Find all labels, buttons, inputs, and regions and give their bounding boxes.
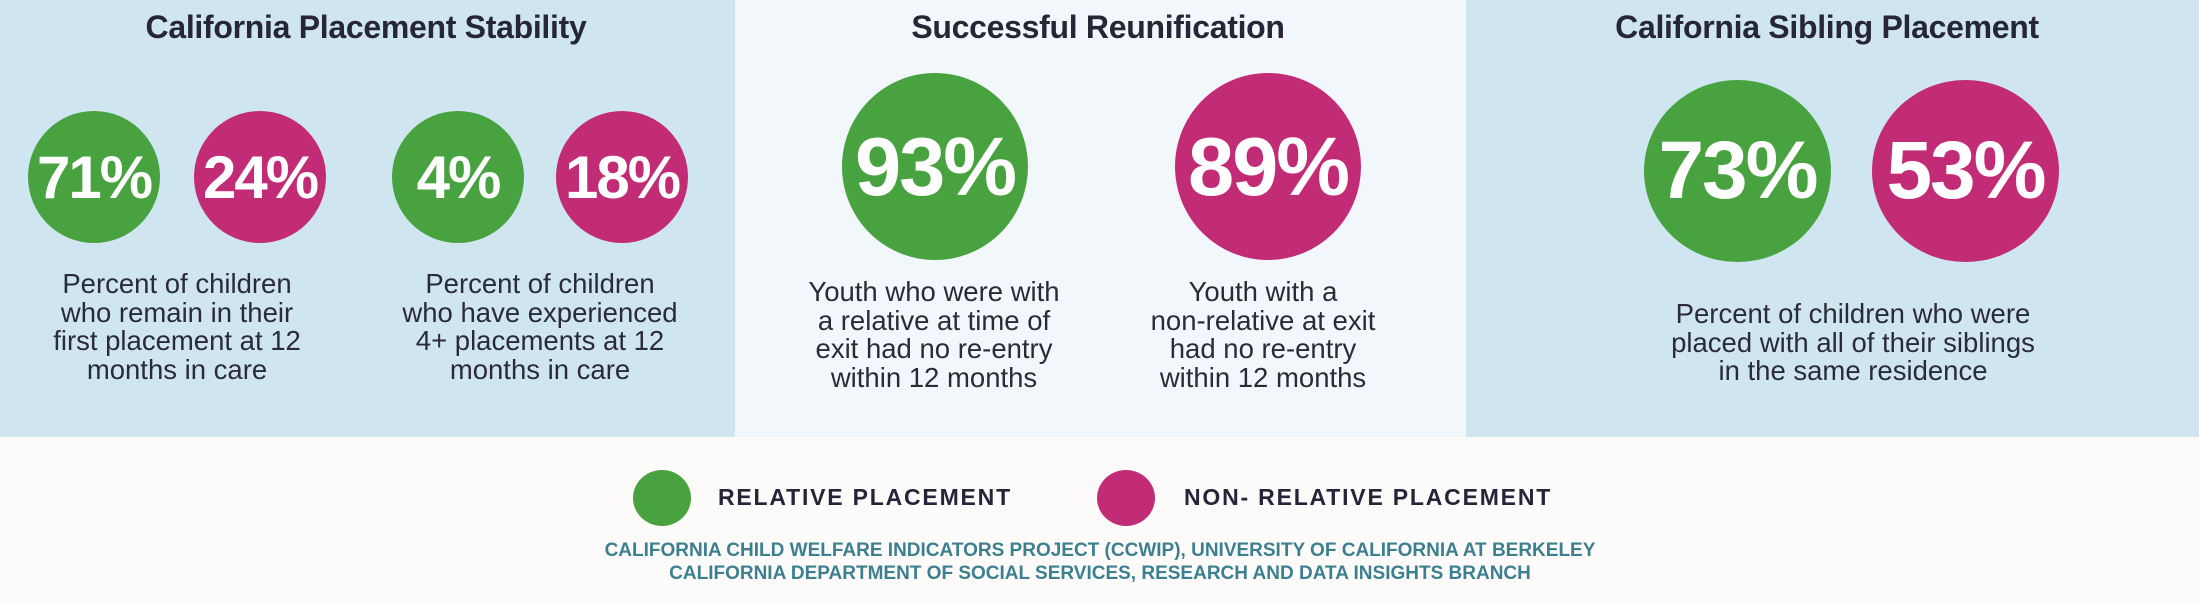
- circle 53%: [1872, 80, 2059, 262]
- legend: non-relative: NON- RELATIVE PLACEMENT: [1184, 484, 1552, 510]
- circle 4%: [392, 111, 524, 243]
- text: non-relative exit: within 12 months: [1160, 362, 1366, 393]
- text: siblings: in the same residence: [1718, 355, 1988, 386]
- legend: [633, 470, 1552, 526]
- panel: reunification: [735, 0, 1466, 437]
- source text: [605, 540, 1596, 584]
- text: first placement: first placement at 12: [53, 325, 301, 356]
- circle 71%: [28, 111, 160, 243]
- text: 4+ placements: Percent of children: [425, 268, 655, 299]
- circle 93%: [842, 73, 1028, 260]
- text: first placement: Percent of children: [62, 268, 292, 299]
- circle 24%: [194, 111, 326, 243]
- text: relative exit: a relative at time of: [818, 305, 1050, 336]
- circle 24%: 24%: [203, 144, 317, 210]
- text: relative exit: exit had no re-entry: [816, 333, 1052, 364]
- legend: relative: RELATIVE PLACEMENT: [718, 484, 1012, 510]
- text: 4+ placements: 4+ placements at 12: [416, 325, 664, 356]
- heading: reunification: Successful Reunification: [911, 9, 1285, 45]
- text: relative exit: [808, 276, 1060, 393]
- heading: placement stability: California Placement Stability: [146, 9, 586, 45]
- text: non-relative exit: non-relative at exit: [1151, 305, 1375, 336]
- legend: non-relative: [1097, 470, 1552, 526]
- text: relative exit: within 12 months: [831, 362, 1037, 393]
- panel: placement stability: [0, 0, 735, 437]
- text: non-relative exit: [1151, 276, 1376, 393]
- circle 4%: 4%: [417, 144, 499, 210]
- circle 89%: [1175, 73, 1361, 260]
- source text: CALIFORNIA CHILD WELFARE INDICATORS PROJECT (CCWIP), UNIVERSITY OF CALIFORNIA AT BERKELEY: [605, 540, 1595, 561]
- text: 4+ placements: months in care: [450, 354, 630, 385]
- text: siblings: placed with all of their siblings: [1671, 327, 2035, 358]
- circle 18%: 18%: [565, 144, 679, 210]
- text: first placement: months in care: [87, 354, 267, 385]
- heading: sibling placement: California Sibling Placement: [1615, 9, 2039, 45]
- circle 53%: 53%: [1886, 125, 2045, 216]
- text: siblings: Percent of children who were: [1676, 298, 2030, 329]
- panel: sibling placement: [1466, 0, 2199, 437]
- text: non-relative exit: Youth with a: [1189, 276, 1337, 307]
- circle 93%: 93%: [855, 120, 1015, 212]
- text: relative exit: Youth who were with: [808, 276, 1060, 307]
- legend: relative: [633, 470, 1012, 526]
- circle 18%: [556, 111, 688, 243]
- circle 73%: 73%: [1658, 125, 1817, 216]
- circle 71%: 71%: [37, 144, 151, 210]
- circle 73%: [1644, 80, 1831, 262]
- text: siblings: [1671, 298, 2035, 386]
- text: 4+ placements: [402, 268, 678, 385]
- text: first placement: who remain in their: [61, 297, 293, 328]
- circle 89%: 89%: [1188, 120, 1348, 212]
- text: first placement: [53, 268, 301, 385]
- text: non-relative exit: had no re-entry: [1170, 333, 1356, 364]
- text: 4+ placements: who have experienced: [402, 297, 678, 328]
- source text: CALIFORNIA DEPARTMENT OF SOCIAL SERVICES, RESEARCH AND DATA INSIGHTS BRANCH: [669, 563, 1531, 584]
